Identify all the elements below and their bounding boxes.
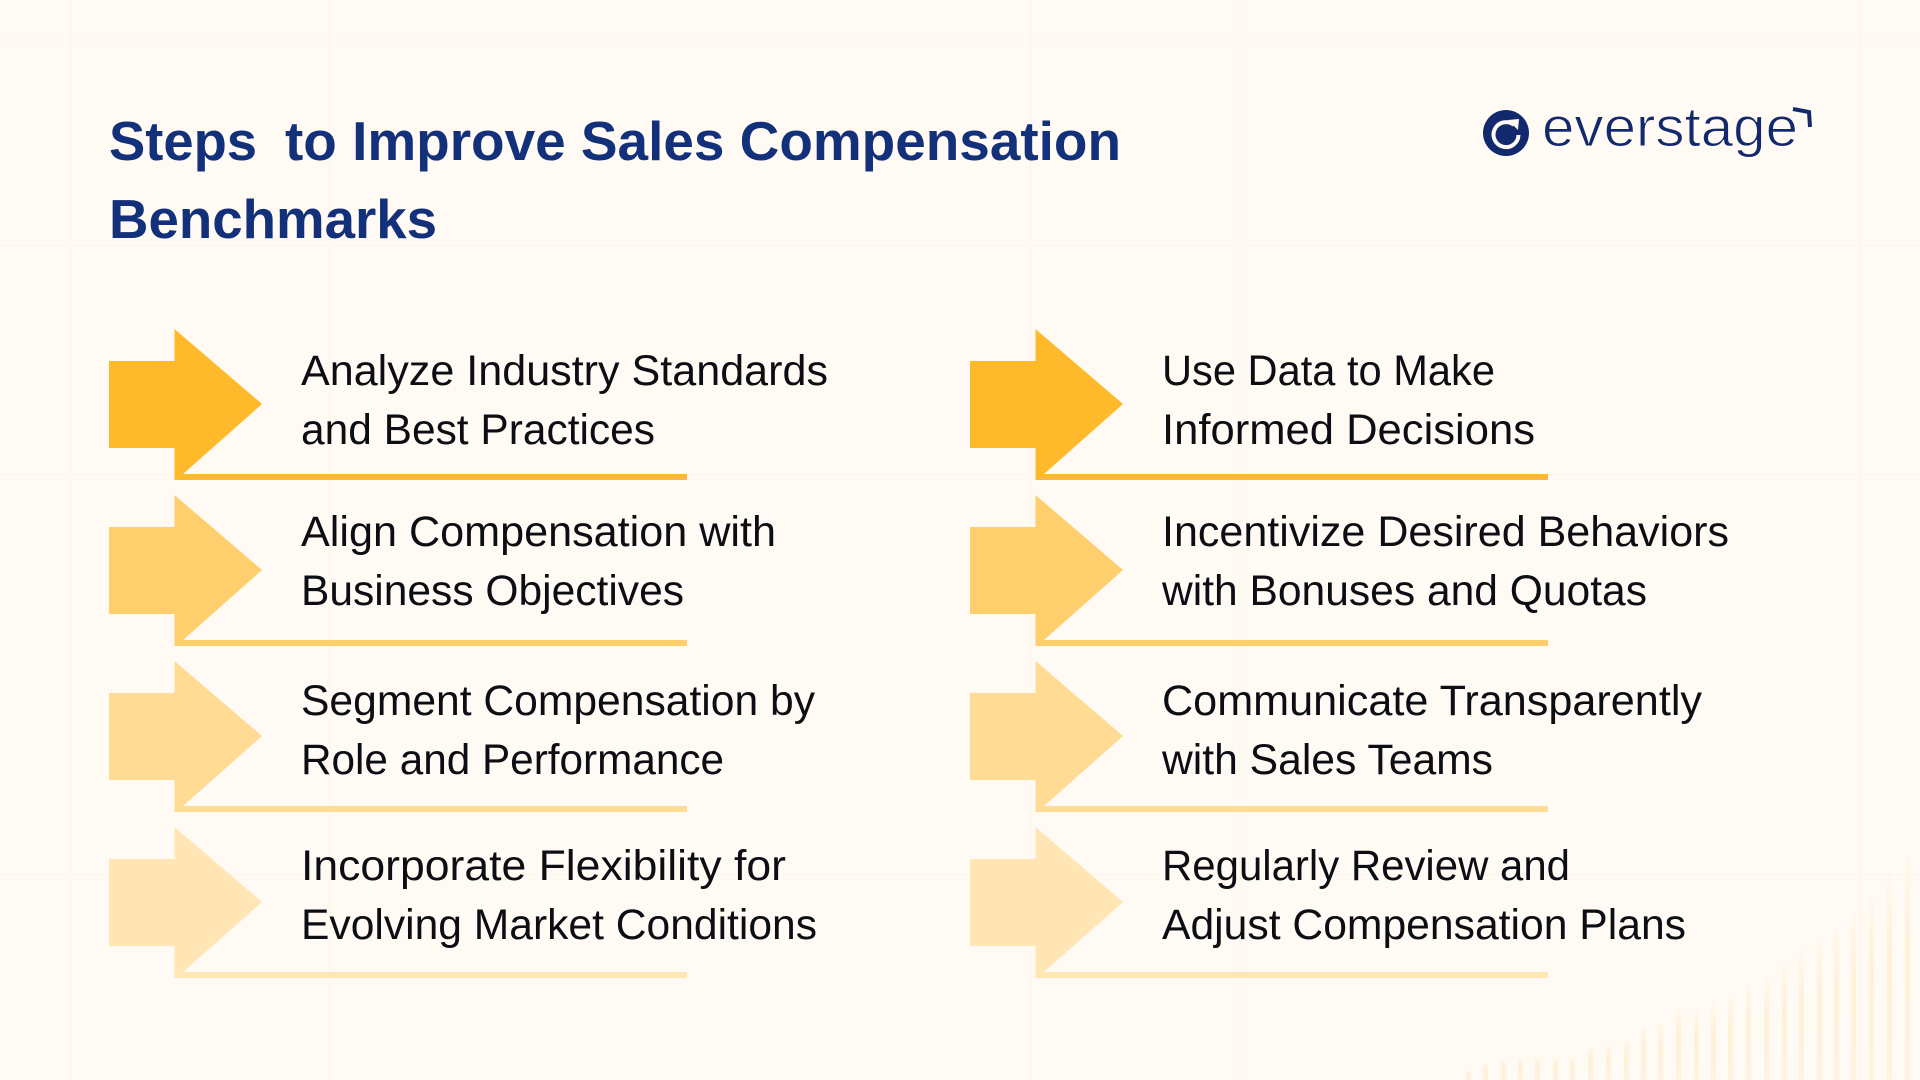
label: Informed Decisions	[1162, 406, 1535, 454]
step: Analyze Industry Standards	[109, 329, 828, 480]
label: Align Compensation with	[301, 508, 776, 556]
label: Use Data to Make	[1162, 347, 1495, 395]
label: Incentivize Desired Behaviors	[1162, 508, 1729, 556]
step: Segment Compensation	[109, 661, 815, 812]
wordmark: everstage	[1542, 95, 1798, 158]
label: Communicate Transparently	[1162, 677, 1702, 725]
logo: everstage	[1483, 95, 1810, 158]
arrow	[970, 329, 1548, 480]
label: Segment Compensation by	[301, 677, 815, 725]
arrow	[109, 827, 687, 978]
arrow	[109, 495, 687, 646]
step: Align Compensation	[109, 495, 776, 646]
icon: logo circle	[1483, 110, 1529, 156]
step: Regularly Review	[970, 827, 1686, 978]
label: Incorporate Flexibility for	[301, 842, 786, 890]
label: Analyze Industry Standards	[301, 347, 828, 395]
step: Communicate	[970, 661, 1702, 812]
label: Business Objectives	[301, 567, 684, 615]
decorative rising bars	[1466, 857, 1910, 1080]
title: Steps	[109, 110, 257, 172]
step: Incentivize	[970, 495, 1729, 646]
label: with Bonuses and Quotas	[1161, 567, 1647, 615]
title: to Improve Sales Compensation	[285, 110, 1121, 172]
step: Incorporate Flexibility	[109, 827, 817, 978]
step: Use Data	[970, 329, 1548, 480]
arrow	[109, 661, 687, 812]
icon: logo corner mark	[1793, 109, 1810, 127]
title	[109, 110, 1121, 250]
label: Regularly Review and	[1162, 842, 1570, 890]
label: Role and Performance	[301, 736, 724, 784]
arrow	[970, 495, 1548, 646]
label: with Sales Teams	[1161, 736, 1493, 784]
arrow	[109, 329, 687, 480]
label: and Best Practices	[301, 406, 655, 454]
arrow	[970, 827, 1548, 978]
arrow	[970, 661, 1548, 812]
title: Benchmarks	[109, 188, 437, 250]
label: Adjust Compensation Plans	[1162, 901, 1686, 949]
label: Evolving Market Conditions	[301, 901, 817, 949]
